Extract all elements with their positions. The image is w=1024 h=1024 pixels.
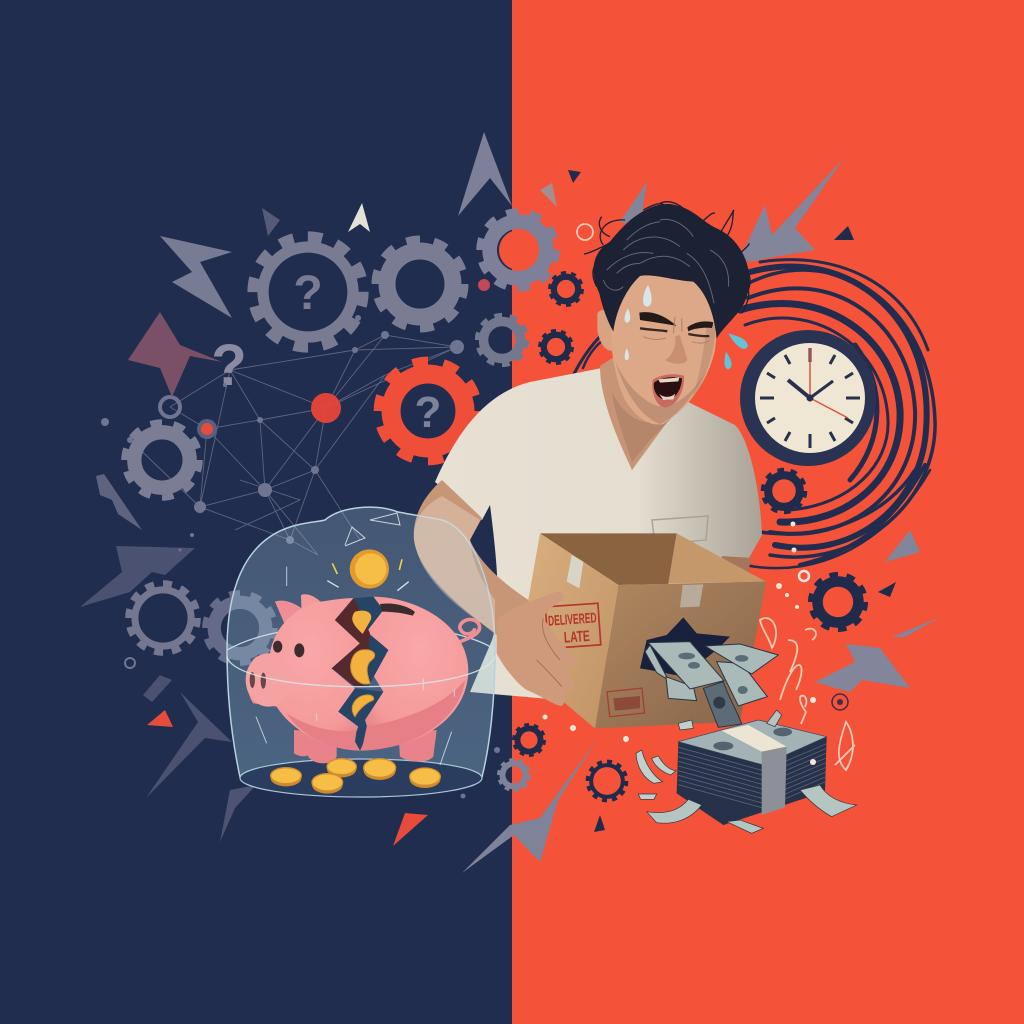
- arm highlight through glass: [414, 496, 495, 632]
- shirt pocket: [652, 516, 708, 545]
- gear: [377, 241, 463, 327]
- panel: navy left background: [0, 0, 512, 1024]
- dome back rim: [227, 628, 495, 650]
- small dark gears right side: [514, 273, 865, 800]
- falling coin: [350, 549, 389, 589]
- loose bills: [636, 720, 693, 799]
- arm: [414, 480, 545, 660]
- man: [414, 202, 762, 700]
- coins in crack: [352, 611, 371, 634]
- network of connected nodes: [130, 335, 457, 555]
- eyebrows: [639, 312, 713, 331]
- ears: [275, 601, 302, 625]
- under-eye and brow creases: [643, 317, 709, 343]
- gear lower left: [129, 584, 197, 652]
- gear at the split: [481, 213, 555, 287]
- far arm stub: [722, 556, 752, 580]
- head: [610, 275, 716, 425]
- cheek shade: [692, 323, 715, 398]
- finger lines: [537, 618, 562, 687]
- body right: [360, 597, 468, 751]
- bills under stack: [647, 710, 857, 833]
- bill details: [678, 653, 748, 709]
- belly shade: [287, 680, 465, 751]
- snout: [246, 653, 291, 707]
- box inner flap: [668, 533, 766, 583]
- coins on floor: [271, 759, 440, 794]
- dome floor ellipse: [240, 759, 482, 797]
- gear left: [126, 424, 198, 496]
- stubble shading: [615, 360, 707, 424]
- barcode label: [607, 688, 645, 717]
- stamp: delivered late: [545, 603, 601, 648]
- piggy bank: [227, 549, 495, 794]
- shirt: [435, 368, 762, 700]
- stamp: delivered late: DELIVERED: [547, 610, 597, 630]
- orange gear with question mark: [380, 363, 476, 459]
- coin slot: [380, 603, 415, 616]
- shards inside dome: [345, 513, 400, 546]
- small grey gear: [499, 760, 529, 790]
- swirl of ink strokes behind clock: [570, 260, 935, 568]
- glass glints: [256, 567, 454, 765]
- left side specks: [125, 383, 500, 798]
- nose: [665, 335, 687, 364]
- wild hair strands: [584, 202, 750, 313]
- hand-drawn doodles: [577, 224, 855, 770]
- sweat drops: [643, 285, 652, 307]
- scattered confetti dots: [542, 522, 816, 765]
- nostrils: [250, 672, 255, 688]
- paper band: [722, 725, 787, 752]
- ear: [597, 310, 615, 351]
- bills from hole: [645, 642, 778, 727]
- gear behind dome: [206, 594, 274, 662]
- dome front rim: [227, 657, 495, 687]
- inside of crack: [332, 597, 388, 687]
- body left: [247, 598, 360, 751]
- small gear: [478, 316, 526, 364]
- network nodes: [101, 279, 490, 544]
- coin sparks: [327, 581, 409, 591]
- neck: [600, 340, 682, 470]
- lightning shards, left: [80, 132, 512, 846]
- lightning shards, right: [462, 158, 940, 873]
- eyes: [273, 641, 282, 653]
- hair: [593, 204, 749, 338]
- stamp: delivered late: LATE: [563, 628, 590, 647]
- box front panel: [595, 582, 766, 728]
- orange gear with question mark: ?: [415, 388, 441, 437]
- glass dome: [227, 496, 495, 797]
- clock: [740, 330, 876, 466]
- hair highlights: [603, 219, 729, 303]
- cardboard box with money: [497, 533, 857, 833]
- torn hole: [640, 617, 730, 677]
- hand: [497, 592, 579, 706]
- gear with question mark, large: ?: [293, 267, 323, 320]
- gear with question mark, large: [253, 237, 363, 347]
- box left panel: [528, 533, 618, 728]
- tail: [460, 619, 480, 642]
- box back wall: [540, 533, 677, 585]
- neck shadow: [612, 392, 672, 462]
- mouth: [652, 374, 684, 407]
- floating question mark: ?: [211, 333, 247, 398]
- panel: orange right background: [512, 0, 1024, 1024]
- tape strips: [567, 555, 583, 588]
- closed eyes: [640, 328, 709, 336]
- money stack: [677, 720, 827, 825]
- legs: [294, 730, 437, 763]
- small target icon: [832, 694, 848, 710]
